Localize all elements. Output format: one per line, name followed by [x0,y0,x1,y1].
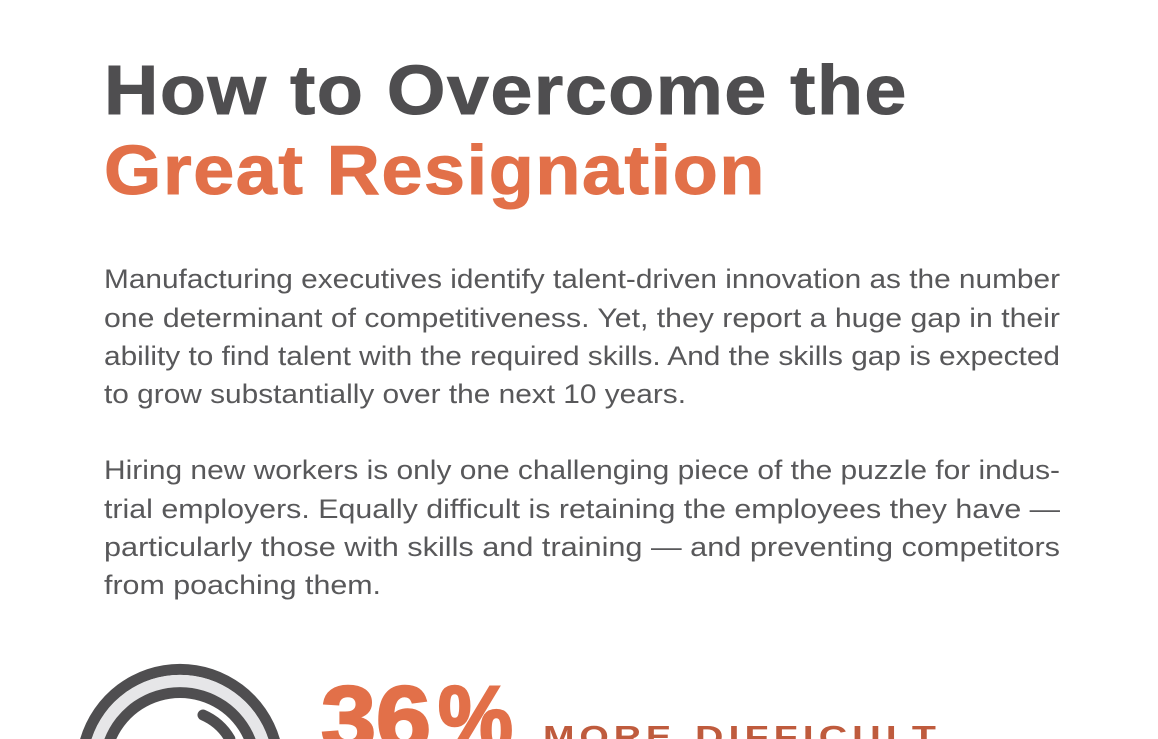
text block: second paragraph: Hiring new workers is only one challenging piece of the puzzle for indus- [104,455,1060,485]
text block: intro paragraph: Manufacturing executives identify talent-driven innovation as the number [104,264,1060,294]
text block: intro paragraph [104,264,1060,409]
statistic label [543,719,941,739]
icon: gauge [80,664,280,739]
title: How to Overcome the [104,51,908,129]
text block: second paragraph: particularly those with skills and training — and preventing competitors [104,532,1060,562]
text block: second paragraph: trial employers. Equally difficult is retaining the employees they have — [104,494,1060,524]
text block: second paragraph: from poaching them. [104,570,381,600]
title [104,51,908,209]
text block: intro paragraph: to grow substantially over the next 10 years. [104,379,686,409]
statistic: 36% [321,668,513,739]
text block: second paragraph [104,455,1060,600]
text block: intro paragraph: one determinant of competitiveness. Yet, they report a huge gap in their [104,303,1060,333]
title: Great Resignation [104,131,766,209]
text block: intro paragraph: ability to find talent with the required skills. And the skills gap is expected [104,341,1060,371]
